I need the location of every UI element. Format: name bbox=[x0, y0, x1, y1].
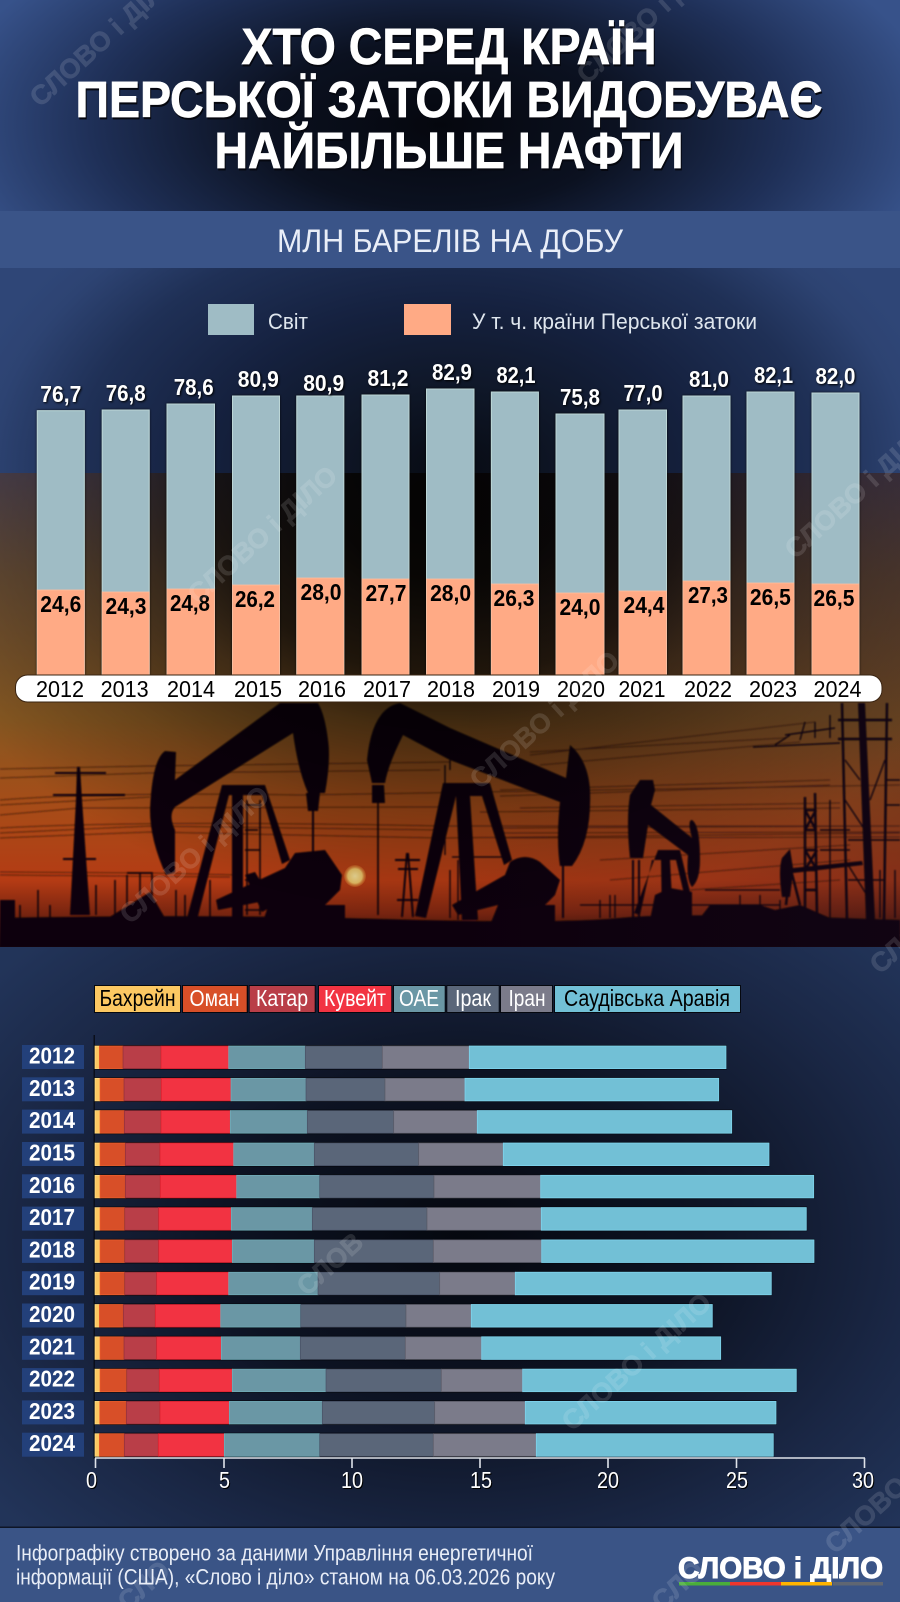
Persian Gulf values: 28,0 bbox=[300, 579, 342, 605]
Persian Gulf values: 24,3 bbox=[106, 593, 146, 619]
world values: 77,0 bbox=[624, 380, 662, 406]
x axis: 0 bbox=[86, 1467, 97, 1493]
x axis: 5 bbox=[219, 1467, 230, 1493]
row 2014: 2014 bbox=[29, 1107, 75, 1133]
row 2012 bbox=[22, 1042, 727, 1070]
year axis pill: 2021 bbox=[618, 676, 666, 702]
x axis: 15 bbox=[470, 1467, 492, 1493]
world values: 80,9 bbox=[238, 366, 279, 392]
year axis pill: 2015 bbox=[234, 676, 282, 702]
panel: lower chart background bbox=[0, 947, 900, 1528]
Persian Gulf values: 26,3 bbox=[494, 585, 534, 611]
row 2021 bbox=[22, 1333, 722, 1360]
band: unit subtitle bbox=[0, 211, 900, 268]
year axis pill: 2018 bbox=[427, 676, 475, 702]
world values: 81,2 bbox=[368, 365, 408, 391]
row 2012: 2012 bbox=[29, 1042, 75, 1068]
row 2020: 2020 bbox=[29, 1301, 75, 1327]
legend: countries bbox=[94, 985, 741, 1013]
world values: 80,9 bbox=[303, 370, 344, 396]
row 2019 bbox=[22, 1269, 772, 1296]
row 2013 bbox=[22, 1075, 720, 1102]
ground bbox=[0, 915, 900, 947]
source note: інформації (США), «Слово і діло» станом на 06.03.2026 року bbox=[16, 1564, 555, 1590]
row 2014 bbox=[22, 1107, 732, 1134]
legend: countries: Ірак bbox=[455, 985, 492, 1011]
row 2024: 2024 bbox=[29, 1430, 75, 1456]
year axis pill: 2024 bbox=[814, 676, 862, 702]
watermarks: СЛОВ bbox=[291, 1227, 369, 1301]
year axis pill: 2014 bbox=[167, 676, 215, 702]
world values: 81,0 bbox=[689, 366, 729, 392]
axis vertical line bbox=[94, 1035, 95, 1459]
band: unit subtitle: МЛН БАРЕЛІВ НА ДОБУ bbox=[277, 223, 624, 259]
x axis: 30 bbox=[852, 1467, 874, 1493]
watermarks: СЛОВО і ДІЛО bbox=[464, 645, 625, 794]
x axis bbox=[86, 1458, 874, 1493]
row 2024 bbox=[22, 1430, 774, 1457]
Persian Gulf values: 24,8 bbox=[170, 590, 210, 616]
row 2017 bbox=[22, 1204, 807, 1231]
world values bbox=[40, 359, 856, 410]
Persian Gulf values: 24,4 bbox=[624, 592, 664, 618]
source note bbox=[16, 1540, 555, 1590]
panel: header background bbox=[0, 0, 900, 211]
x axis: 25 bbox=[726, 1467, 748, 1493]
title: ХТО СЕРЕД КРАЇН bbox=[242, 18, 656, 75]
world values: 82,1 bbox=[496, 362, 536, 388]
row 2023 bbox=[22, 1398, 777, 1425]
Persian Gulf values: 26,2 bbox=[235, 586, 275, 612]
silhouettes bbox=[0, 703, 900, 947]
row 2016 bbox=[22, 1172, 814, 1199]
row 2015 bbox=[22, 1140, 770, 1167]
Persian Gulf values bbox=[40, 579, 855, 620]
legend: upper chart: У т. ч. країни Перської затоки bbox=[472, 309, 757, 334]
row 2017: 2017 bbox=[29, 1204, 75, 1230]
x axis: 20 bbox=[597, 1467, 619, 1493]
watermarks: СЛОВО і ДІЛО bbox=[182, 460, 343, 609]
panel: upper chart background bbox=[0, 268, 900, 474]
legend: countries: Бахрейн bbox=[100, 985, 176, 1011]
left transmission tower bbox=[53, 767, 125, 915]
small left tower bbox=[395, 853, 420, 917]
legend: countries: ОАЕ bbox=[399, 985, 439, 1011]
stacked bar chart: production by country bbox=[22, 1042, 815, 1457]
title: НАЙБІЛЬШЕ НАФТИ bbox=[214, 121, 684, 179]
row 2018 bbox=[22, 1236, 815, 1264]
logo: СЛОВО і ДІЛО bbox=[678, 1552, 883, 1585]
Persian Gulf values: 27,3 bbox=[688, 582, 728, 608]
year axis pill: 2022 bbox=[684, 676, 732, 702]
bar chart: world and Persian Gulf oil production bbox=[37, 359, 859, 676]
row 2022: 2022 bbox=[29, 1366, 75, 1392]
Persian Gulf values: 24,6 bbox=[40, 591, 81, 617]
background fences and shrubs bbox=[580, 890, 780, 918]
photo vignette bbox=[0, 473, 900, 947]
legend: countries: Кувейт bbox=[324, 985, 386, 1011]
legend: countries: Оман bbox=[190, 985, 240, 1011]
watermarks: СЛОВО і ДІЛО bbox=[556, 1287, 717, 1436]
row 2022 bbox=[22, 1366, 797, 1393]
footer band bbox=[0, 1526, 900, 1602]
row 2016: 2016 bbox=[29, 1172, 75, 1198]
Persian Gulf values: 28,0 bbox=[430, 580, 471, 606]
Persian Gulf values: 24,0 bbox=[560, 594, 600, 620]
world values: 78,6 bbox=[174, 374, 214, 400]
middle lattice tower bbox=[804, 793, 817, 917]
row 2020 bbox=[22, 1301, 713, 1328]
title bbox=[76, 18, 822, 179]
power lines bbox=[0, 722, 900, 890]
legend: countries: Саудівська Аравія bbox=[564, 985, 730, 1011]
title: ПЕРСЬКОЇ ЗАТОКИ ВИДОБУВАЄ bbox=[76, 71, 822, 128]
row 2015: 2015 bbox=[29, 1140, 75, 1166]
world values: 76,8 bbox=[106, 380, 146, 406]
year axis pill: 2023 bbox=[749, 676, 797, 702]
pumpjack 2 bbox=[367, 703, 590, 925]
watermarks: СЛОВО і ДІЛО bbox=[114, 780, 275, 929]
year axis pill: 2017 bbox=[363, 676, 411, 702]
year axis pill: 2016 bbox=[298, 676, 346, 702]
legend: upper chart bbox=[208, 304, 757, 335]
world values: 82,9 bbox=[432, 359, 472, 385]
row 2013: 2013 bbox=[29, 1075, 75, 1101]
pumpjack 3 bbox=[628, 780, 700, 920]
large lattice tower bbox=[753, 703, 900, 920]
year axis pill: 2019 bbox=[492, 676, 540, 702]
year axis pill: 2020 bbox=[557, 676, 605, 702]
sun bbox=[344, 865, 366, 887]
x axis: 10 bbox=[341, 1467, 363, 1493]
row 2023: 2023 bbox=[29, 1398, 75, 1424]
row 2018: 2018 bbox=[29, 1236, 75, 1262]
world values: 82,0 bbox=[816, 363, 856, 389]
Persian Gulf values: 26,5 bbox=[750, 584, 791, 610]
legend: countries: Катар bbox=[256, 985, 308, 1011]
shed and low structures left bbox=[0, 873, 210, 920]
Persian Gulf values: 27,7 bbox=[366, 580, 406, 606]
pumpjack 4 bbox=[780, 849, 863, 905]
row 2019: 2019 bbox=[29, 1269, 75, 1295]
row 2021: 2021 bbox=[29, 1333, 75, 1359]
Persian Gulf values: 26,5 bbox=[814, 585, 854, 611]
pumpjack 1 bbox=[150, 703, 345, 925]
world values: 82,1 bbox=[754, 362, 793, 388]
world values: 76,7 bbox=[40, 381, 81, 407]
legend: upper chart: Світ bbox=[268, 309, 308, 334]
world values: 75,8 bbox=[560, 384, 600, 410]
photo: oil pumpjacks at sunset bbox=[0, 473, 900, 947]
year axis pill: 2013 bbox=[101, 676, 149, 702]
source note: Інфографіку створено за даними Управління енергетичної bbox=[16, 1540, 533, 1566]
year axis pill bbox=[16, 675, 882, 702]
legend: countries: Іран bbox=[508, 985, 546, 1011]
year axis pill: 2012 bbox=[36, 676, 84, 702]
